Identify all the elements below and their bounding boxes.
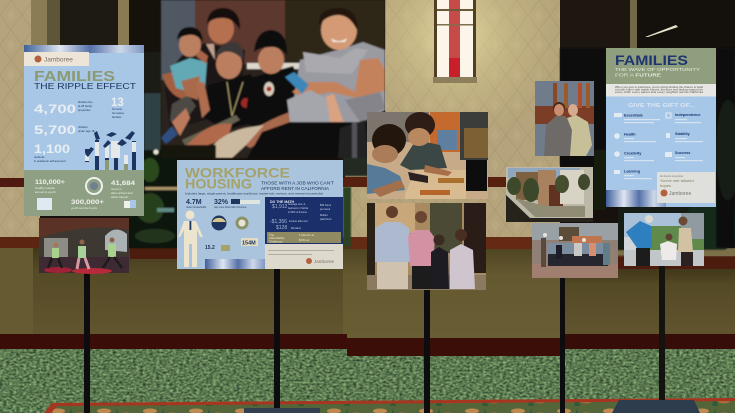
olive panel with youth figures: healthy snacks xyxy=(35,186,55,190)
boy in blue xyxy=(367,124,428,197)
gift list: Creativity xyxy=(624,152,642,156)
statistics: 13 xyxy=(111,97,124,109)
swirl footer art xyxy=(606,190,666,207)
subheading: AFFORD RENT IN CALIFORNIA xyxy=(261,186,330,191)
callout xyxy=(657,172,715,203)
do the math panel: paid hours xyxy=(320,218,332,221)
do the math panel: Mother xyxy=(320,214,328,217)
photo: apartment building rendering xyxy=(506,167,593,222)
heading xyxy=(185,164,290,192)
stats xyxy=(186,199,260,251)
olive panel with youth figures: 41,684 xyxy=(111,181,136,187)
do the math panel: is 50% of income xyxy=(288,211,308,214)
do the math panel: income after rent xyxy=(289,220,308,223)
mother xyxy=(408,211,435,289)
seals xyxy=(212,216,248,230)
gift list: Success xyxy=(675,151,690,155)
statistics: 5,700 xyxy=(34,123,76,137)
do the math panel: Remains xyxy=(291,227,302,230)
header swirl strip xyxy=(24,45,144,53)
do the math panel: $1,912 xyxy=(272,204,288,210)
window view with garden foliage xyxy=(129,48,735,256)
graduation caps and pencils icon xyxy=(85,131,136,170)
main photo: family on a bench xyxy=(161,0,385,158)
stats: pay more than half of income xyxy=(214,206,247,209)
olive panel with youth figures: hours in xyxy=(111,187,122,191)
olive header xyxy=(606,48,716,84)
tan stat box: 154M xyxy=(242,240,256,246)
heading: WORKFORCE xyxy=(185,164,290,180)
olive header: FAMILIES xyxy=(615,52,688,68)
olive header: FOR A FUTURE xyxy=(615,72,661,78)
olive header: THE WAVE OF OPPORTUNITY xyxy=(615,67,700,72)
poster stands xyxy=(84,265,700,413)
do the math panel: Challenge xyxy=(269,240,283,244)
statistics: 4,700 xyxy=(34,102,76,116)
poster: Families the ripple effect xyxy=(24,45,144,216)
statistics: students xyxy=(34,155,45,159)
stats: renter households xyxy=(186,206,207,209)
do the math panel: Average rent, 2- xyxy=(288,203,306,206)
callout: All donors remember xyxy=(660,175,683,178)
swirl footer xyxy=(205,259,265,269)
rug xyxy=(44,398,735,413)
statistics: families live xyxy=(78,100,93,104)
stats: 4.7M xyxy=(186,199,202,206)
olive panel with youth figures: served to youth xyxy=(35,190,56,194)
statistics: homeless xyxy=(112,111,125,115)
wall lamp xyxy=(433,0,477,83)
statistics: properties xyxy=(78,108,91,112)
give the gift heading: GIVE THE GIFT OF... xyxy=(628,103,696,109)
child xyxy=(431,234,449,289)
gift list: Learning xyxy=(624,170,641,174)
intro text strip: When you give to Jamboree, you're giving families the chance to build xyxy=(615,86,704,89)
intro text strip: a better future with stable homes, services and lasting support for xyxy=(615,88,703,92)
do the math panel: DO THE MATH xyxy=(270,200,295,204)
olive panel with youth figures: 110,000+ xyxy=(35,180,66,186)
jamboree footer: Jamboree xyxy=(314,259,335,264)
gift list: Essentials xyxy=(624,114,643,118)
statistics: 1,100 xyxy=(34,142,70,156)
callout: You've met tailored xyxy=(660,178,694,183)
do the math panel: bedroom in SoCal xyxy=(288,207,308,210)
boy xyxy=(205,30,300,158)
gift icons xyxy=(614,113,672,174)
carpet xyxy=(0,349,735,413)
do the math panel: -$1,356 xyxy=(270,219,287,225)
Jamboree logo box xyxy=(24,52,89,66)
heading: THE RIPPLE EFFECT xyxy=(34,82,136,91)
boy in plaid xyxy=(400,112,452,176)
olive panel with youth figures: youth service hours xyxy=(71,206,98,210)
jamboree footer xyxy=(265,244,343,269)
Jamboree logo box: Jamboree xyxy=(44,56,73,64)
gift list xyxy=(624,113,701,174)
gift descriptions xyxy=(624,119,703,179)
stats: 15.2 xyxy=(205,245,215,251)
mom with baby carrier xyxy=(285,8,385,127)
toddler xyxy=(161,27,208,144)
dad xyxy=(162,8,245,130)
tan stat box xyxy=(221,238,258,251)
photo: children drawing xyxy=(367,112,488,199)
callout: Jamboree xyxy=(669,191,691,197)
photo: volunteer group at a construction site xyxy=(532,223,618,278)
worker figure xyxy=(178,210,203,267)
statistics: under age 18 xyxy=(78,129,95,133)
olive panel with youth figures: after-school and xyxy=(111,191,133,195)
subheading xyxy=(185,180,334,196)
poster: Families the wave of opportunity xyxy=(606,48,716,207)
heading: HOUSING xyxy=(185,176,252,192)
callout: hopes xyxy=(660,183,671,188)
subheading: Includes large, single parent, healthcare workforce, transit-rich, seniors, and veteran households xyxy=(185,192,324,196)
gift list: Health xyxy=(624,132,636,136)
photo: coaches with seated woman on a field xyxy=(624,213,704,266)
heading xyxy=(34,68,136,91)
poster: Workforce Housing xyxy=(177,160,343,269)
photo: family of four xyxy=(367,203,486,290)
gift list: Independence xyxy=(675,113,701,117)
do the math panel xyxy=(265,197,343,244)
do the math panel: The xyxy=(269,233,275,237)
olive panel with youth figures: 300,000+ xyxy=(71,200,105,206)
heading: FAMILIES xyxy=(34,68,115,85)
do the math panel: $30 hours xyxy=(320,204,332,207)
teen xyxy=(450,229,475,289)
stats: 32% xyxy=(214,199,229,206)
gift list: Stability xyxy=(675,132,691,136)
do the math panel: per week xyxy=(320,208,331,211)
intro text strip: every child, every parent and every neighbor across California xyxy=(615,91,704,94)
do the math panel: Affordability xyxy=(269,236,285,240)
baseboard xyxy=(0,334,735,351)
olive panel with youth figures xyxy=(24,170,144,216)
center baseboard xyxy=(347,338,560,356)
do the math panel: 1 Renter at xyxy=(299,233,314,237)
subheading: THOSE WITH A JOB WHO CAN'T xyxy=(261,180,334,186)
statistics: in academic achievement xyxy=(34,159,66,163)
statistics: children xyxy=(78,125,88,129)
statistics: families xyxy=(112,115,122,119)
photo: yoga class xyxy=(39,218,129,274)
lap and bag xyxy=(247,122,367,158)
intro text strip xyxy=(606,84,716,96)
olive panel with youth figures: adult support xyxy=(111,195,129,199)
do the math panel: $128 xyxy=(276,225,287,231)
statistics: formerly xyxy=(112,107,123,111)
statistics xyxy=(34,97,125,163)
statistics: at 28 family xyxy=(78,104,93,108)
do the math panel: $X/hour xyxy=(299,238,310,242)
father xyxy=(375,206,412,289)
girl xyxy=(182,42,260,158)
photo: two women under palms xyxy=(535,81,594,156)
